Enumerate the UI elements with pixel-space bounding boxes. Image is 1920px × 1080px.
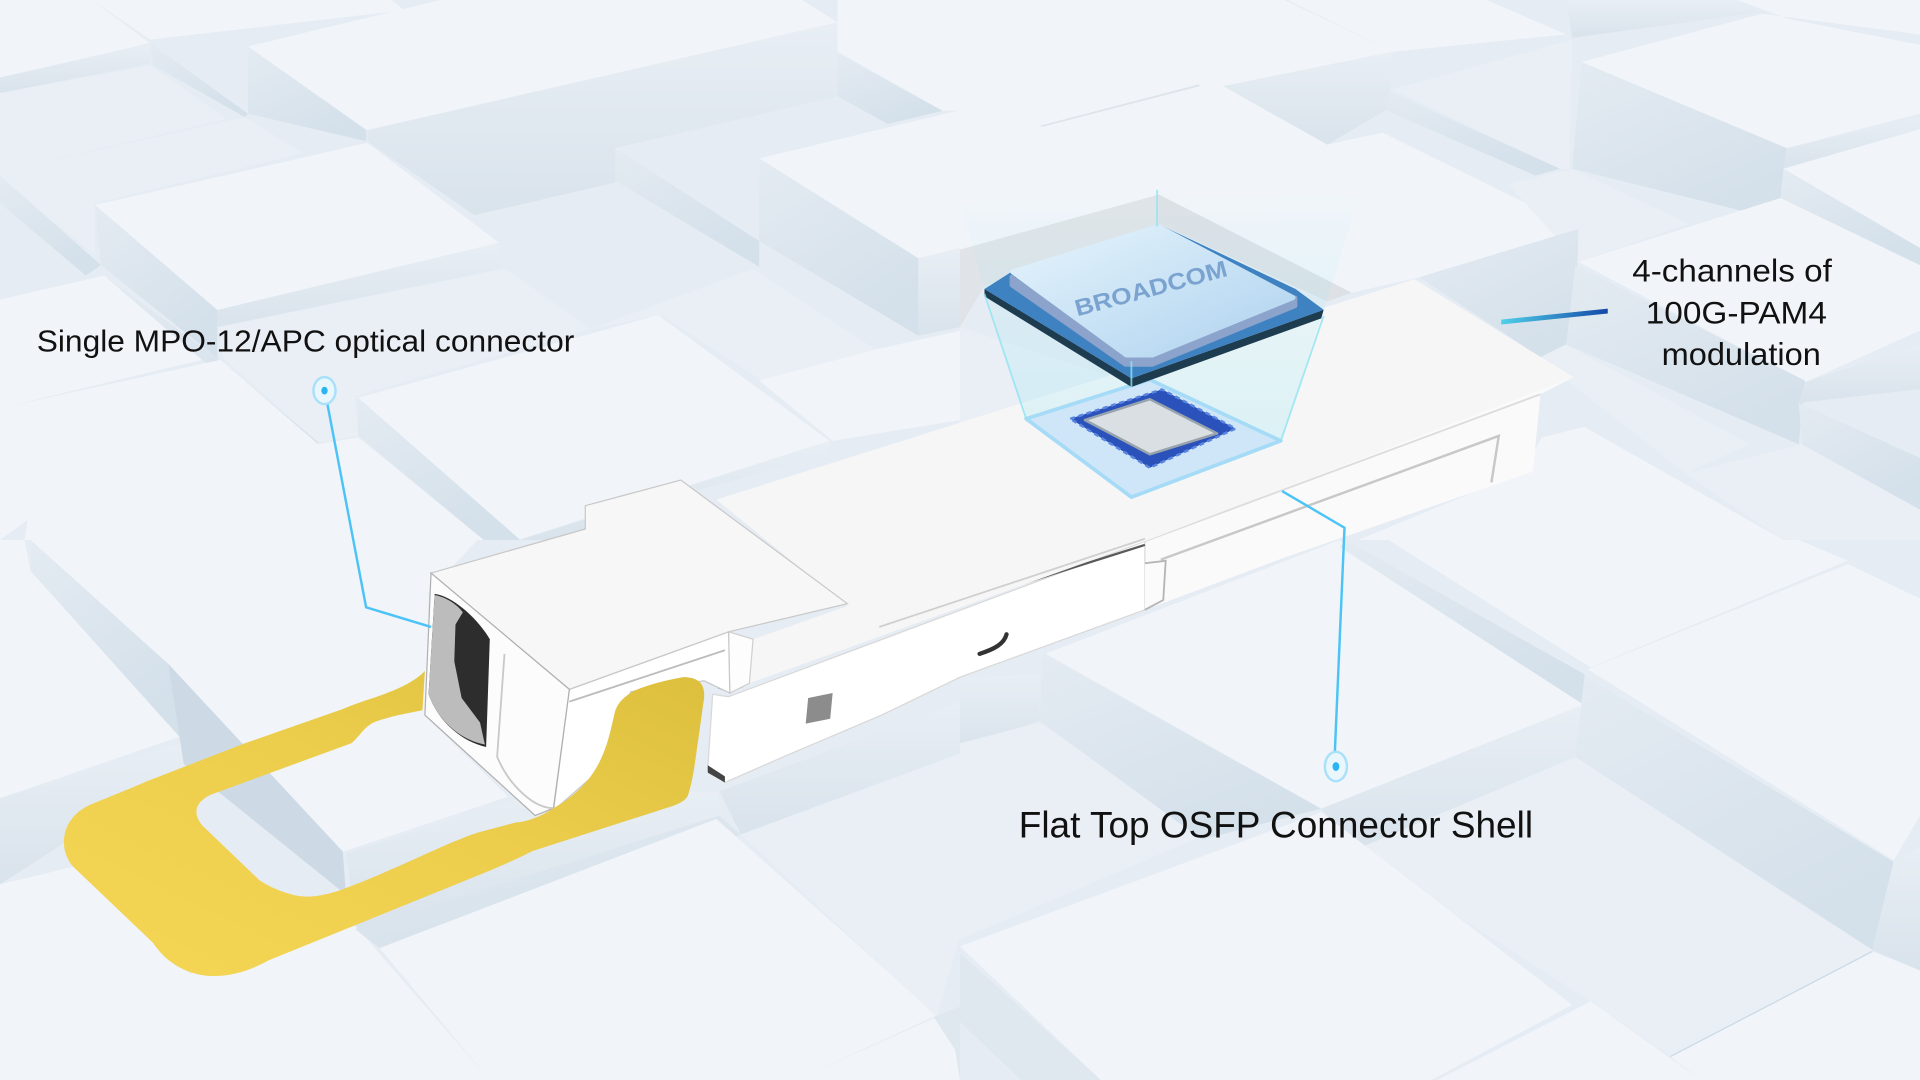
leader line	[1501, 309, 1608, 324]
blocks top-right	[960, 0, 1920, 540]
blocks bottom-right	[960, 540, 1920, 1080]
callout: connector shell	[1019, 491, 1533, 846]
top plate	[716, 279, 1573, 683]
plate edge shadow	[1145, 394, 1540, 541]
latch window	[806, 693, 833, 724]
leader line	[327, 402, 431, 627]
metal side section	[708, 541, 1145, 782]
lower chip carrier	[1026, 380, 1281, 497]
housing inner rim	[569, 650, 725, 702]
chip illustration	[960, 190, 1360, 497]
leader line	[1282, 491, 1344, 756]
lower chip navy ring	[1070, 389, 1236, 468]
label: 100G-PAM4	[1646, 294, 1827, 330]
housing front face	[425, 573, 569, 816]
lower chip die	[1085, 399, 1217, 454]
anchor dot	[313, 377, 336, 404]
rear tab	[1145, 561, 1166, 610]
front face inner outline	[497, 654, 553, 808]
blocks top-left	[0, 0, 960, 540]
shell right side face	[1133, 377, 1573, 612]
chip substrate edge	[984, 289, 1324, 387]
chip heat spreader top	[1013, 227, 1293, 355]
connector port metal	[429, 595, 485, 744]
side slot	[1161, 436, 1499, 560]
label: Single MPO-12/APC optical connector	[37, 324, 574, 358]
callout: modulation	[1501, 253, 1841, 372]
callout: optical connector	[37, 324, 574, 627]
label: Flat Top OSFP Connector Shell	[1019, 805, 1533, 846]
label: 4-channels of	[1632, 253, 1832, 289]
chip heat spreader side	[1011, 277, 1296, 365]
label: modulation	[1662, 336, 1821, 372]
chip substrate	[984, 224, 1324, 378]
chip brand text: BROADCOM	[1072, 256, 1230, 321]
latch slot	[980, 634, 1007, 654]
anchor dot	[1325, 752, 1347, 781]
optical module	[64, 279, 1573, 976]
light beam	[960, 192, 1360, 497]
connector port	[429, 594, 490, 747]
slot shadow line	[882, 545, 1145, 628]
housing top face	[431, 480, 847, 689]
blocks bottom-left	[0, 540, 960, 1080]
beam edges	[984, 190, 1324, 441]
housing side face	[553, 632, 730, 811]
housing step wall	[729, 632, 753, 693]
pull tab	[64, 671, 704, 976]
plate inner line	[879, 539, 1145, 627]
